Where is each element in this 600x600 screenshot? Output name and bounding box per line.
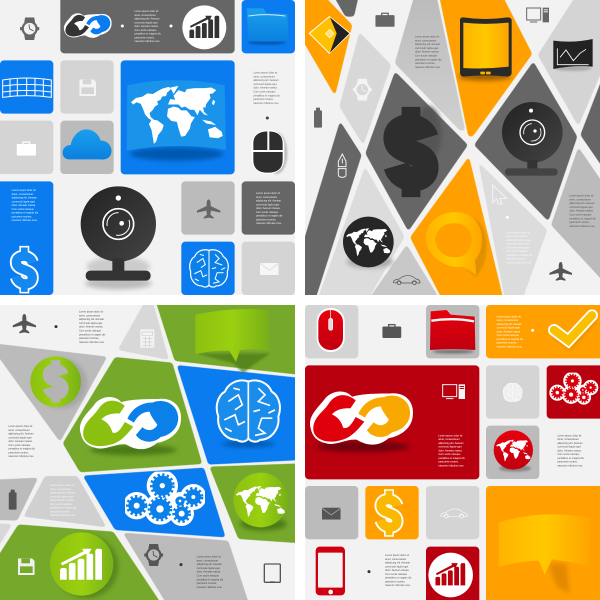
icon: briefcase — [375, 13, 395, 27]
text block: dollar tile: Lorem ipsum dolor sit — [12, 189, 36, 192]
text block: header tile: adipiscing elit. Aenean — [134, 18, 160, 21]
text block: check tile: nascetur ridiculus mus. — [497, 345, 523, 348]
text block: right grey: dolor. Aenean massa. — [569, 210, 594, 213]
check tile — [486, 305, 600, 358]
text block: dark tile: Lorem ipsum dolor sit — [256, 192, 280, 195]
text block: phone row: penatibus et magnis dis — [385, 577, 412, 580]
icon: brain — [217, 380, 280, 447]
icon: pen nib — [338, 154, 346, 177]
map tile — [121, 60, 235, 174]
text block: right: commodo ligula eget — [557, 446, 581, 449]
panel: orange polygon infographic — [298, 0, 600, 302]
icon: bar chart badge — [428, 553, 473, 597]
marker dots — [367, 329, 534, 573]
icon: gears — [125, 472, 205, 524]
text block: cursor panel: nascetur ridiculus mus. — [506, 261, 532, 264]
geometric polygons — [298, 0, 600, 302]
icon: usb stick — [9, 490, 17, 510]
icon: cloud link sticker — [310, 391, 413, 452]
text block: red panel: adipiscing elit. Aenean — [438, 442, 464, 445]
icon: briefcase — [382, 325, 401, 338]
text block: grey triangle: adipiscing elit. Aenean — [415, 43, 441, 46]
icon: tablet — [458, 17, 512, 81]
icon: cursor — [493, 185, 507, 204]
icon: cloud link sticker — [64, 13, 112, 38]
text block: light grey: nascetur ridiculus mus. — [50, 514, 76, 517]
text block: left: nascetur ridiculus mus. — [8, 455, 34, 458]
text block: right: Lorem ipsum dolor sit — [557, 434, 582, 437]
text block: grey triangle: nascetur ridiculus mus. — [415, 66, 441, 69]
text block: top: commodo ligula eget — [79, 322, 103, 325]
text block: check tile: parturient montes, — [497, 342, 517, 345]
text block: top: Cum sociis natoque — [79, 329, 102, 332]
gears tile — [547, 365, 600, 419]
briefcase tile — [0, 121, 53, 174]
dark text tile — [242, 181, 295, 235]
icon: folder — [247, 8, 289, 45]
text block: lower right: commodo ligula eget — [197, 567, 220, 570]
icon: webcam — [81, 186, 156, 289]
text block: dark tile: commodo ligula eget — [256, 203, 280, 206]
text block: lower right: nascetur ridiculus mus. — [197, 586, 223, 589]
globe tile — [486, 426, 539, 479]
text block: left: parturient montes, — [8, 451, 29, 454]
text block: right: Cum sociis natoque — [557, 453, 580, 456]
icon: dollar sign — [16, 246, 32, 293]
text block: left: amet, consectetuer — [8, 429, 30, 432]
text block: dark tile: adipiscing elit. Aenean — [256, 200, 282, 203]
text block: lower right: dolor. Aenean massa. — [197, 571, 221, 574]
text block: dollar tile: dolor. Aenean massa. — [12, 204, 36, 207]
text block: right: adipiscing elit. Aenean — [557, 442, 583, 445]
icon: cloud — [63, 129, 112, 160]
text block: right: dolor. Aenean massa. — [557, 449, 582, 452]
text block: lower right: parturient montes, — [197, 582, 217, 585]
icon: globe — [343, 217, 394, 268]
text block: check tile: penatibus et magnis dis — [497, 338, 524, 341]
text block: dark tile: nascetur ridiculus mus. — [256, 222, 282, 225]
text block: right grey: adipiscing elit. Aenean — [569, 202, 595, 205]
text block: phone row: parturient montes, — [385, 580, 406, 583]
text block: grey triangle: dolor. Aenean massa. — [415, 51, 439, 54]
icon: grid panel — [3, 78, 51, 97]
icon: dollar badge — [30, 356, 87, 409]
text block: light grey: adipiscing elit. Aenean — [50, 492, 76, 495]
text block: red panel: nascetur ridiculus mus. — [438, 464, 464, 467]
map sticker — [127, 80, 226, 161]
icon: speech bubble — [499, 514, 591, 593]
icon: plane — [549, 262, 572, 281]
text block: upper right: amet, consectetuer — [253, 75, 275, 78]
text block: red panel: Lorem ipsum dolor sit — [438, 434, 463, 437]
brain tile — [181, 242, 235, 295]
text block: upper right: adipiscing elit. Aenean — [253, 79, 279, 82]
icon: globe — [494, 430, 533, 472]
text block: grey triangle: Lorem ipsum dolor sit — [415, 36, 439, 39]
icon: watch outline — [353, 79, 372, 101]
icon: calculator — [140, 329, 154, 348]
text block: top: nascetur ridiculus mus. — [79, 341, 105, 344]
text block: cursor panel: commodo ligula eget — [506, 243, 530, 246]
mouse tile — [305, 305, 358, 358]
text block: grey triangle: parturient montes, — [415, 62, 436, 65]
text block: left: commodo ligula eget — [8, 436, 32, 439]
text block: top: parturient montes, — [79, 337, 100, 340]
marker dots — [54, 325, 182, 566]
text block: phone row: adipiscing elit. Aenean — [385, 562, 411, 565]
icon: computer — [527, 8, 549, 22]
text block: right grey: amet, consectetuer — [569, 198, 591, 201]
text block: phone row: dolor. Aenean massa. — [385, 569, 409, 572]
text block: upper right: dolor. Aenean massa. — [253, 87, 278, 90]
text block: dollar tile: amet, consectetuer — [12, 193, 33, 196]
text block: grey triangle: penatibus et magnis dis — [415, 58, 442, 61]
text block: left: dolor. Aenean massa. — [8, 440, 33, 443]
text block: light grey: penatibus et magnis dis — [50, 507, 77, 510]
text block: top: dolor. Aenean massa. — [79, 326, 103, 329]
text block: red panel: commodo ligula eget — [438, 446, 462, 449]
text block: grey triangle: Cum sociis natoque — [415, 54, 438, 57]
text block: dark tile: amet, consectetuer — [256, 196, 278, 199]
panel: red tile infographic — [305, 305, 600, 600]
text block: phone row: commodo ligula eget — [385, 565, 409, 568]
text block: check tile: Lorem ipsum dolor sit — [497, 315, 521, 318]
dark header tile — [60, 0, 235, 53]
text block: top: Lorem ipsum dolor sit — [79, 311, 103, 314]
text block: top: amet, consectetuer — [79, 314, 101, 317]
plane tile — [181, 181, 235, 235]
text block: right grey: parturient montes, — [569, 221, 590, 224]
text block: check tile: commodo ligula eget — [497, 327, 520, 330]
folder tile — [426, 305, 479, 358]
text block: right grey: Lorem ipsum dolor sit — [569, 195, 594, 198]
main red panel — [305, 365, 479, 479]
text block: red panel: penatibus et magnis dis — [438, 457, 466, 460]
icon: check mark — [554, 315, 593, 343]
text block: header tile: parturient montes, — [134, 36, 155, 39]
text block: dollar tile: parturient montes, — [12, 215, 32, 218]
text block: lower right: amet, consectetuer — [197, 559, 218, 562]
text block: cursor panel: amet, consectetuer — [506, 235, 528, 238]
icon: computer — [443, 384, 465, 399]
text block: left: adipiscing elit. Aenean — [8, 433, 34, 436]
text block: phone row: Lorem ipsum dolor sit — [385, 554, 409, 557]
text block: cursor panel: Cum sociis natoque — [506, 250, 529, 253]
chart tile — [426, 547, 479, 600]
icon: wristwatch — [20, 17, 39, 40]
dollar tile — [365, 486, 419, 539]
icon: bar chart badge — [50, 532, 118, 598]
icon: watch — [144, 544, 163, 566]
folder tile — [242, 0, 295, 53]
text block: light grey: Cum sociis natoque — [50, 503, 73, 506]
text block: light grey: commodo ligula eget — [50, 495, 74, 498]
text block: red panel: Cum sociis natoque — [438, 453, 461, 456]
icon: smartphone — [316, 547, 345, 595]
icon: floppy disk — [18, 558, 35, 575]
cloud tile — [60, 121, 114, 174]
text block: cursor panel: adipiscing elit. Aenean — [506, 239, 532, 242]
text block: right: nascetur ridiculus mus. — [557, 464, 583, 467]
icon: folder — [430, 310, 475, 354]
icon: large dollar — [396, 107, 442, 197]
text block: check tile: amet, consectetuer — [497, 319, 518, 322]
text block: dollar tile: nascetur ridiculus mus. — [12, 219, 38, 222]
icon: floppy disk — [79, 79, 96, 96]
text block: left: Lorem ipsum dolor sit — [8, 425, 33, 428]
text block: right: penatibus et magnis dis — [557, 457, 585, 460]
text block: upper right: commodo ligula eget — [253, 83, 277, 86]
geometric polygons — [0, 298, 302, 600]
text block: top: adipiscing elit. Aenean — [79, 318, 105, 321]
text block: right grey: nascetur ridiculus mus. — [569, 225, 595, 228]
text block: header tile: Lorem ipsum dolor sit — [134, 10, 159, 13]
speech tile — [486, 486, 600, 600]
text block: dark tile: penatibus et magnis dis — [256, 215, 283, 218]
text block: light grey: dolor. Aenean massa. — [50, 499, 74, 502]
icon: stock chart — [553, 39, 593, 71]
text block: red panel: amet, consectetuer — [438, 438, 460, 441]
text block: header tile: nascetur ridiculus mus. — [134, 40, 160, 43]
text block: dark tile: Cum sociis natoque — [256, 211, 279, 214]
icon: dollar sign — [381, 489, 397, 537]
icon: bar chart badge — [182, 5, 226, 49]
icon: plane — [197, 199, 220, 219]
icon: cloud link sticker — [80, 397, 181, 455]
icon: envelope — [322, 508, 341, 520]
marker dot — [506, 216, 509, 219]
icon: car — [441, 509, 467, 518]
text block: grey triangle: commodo ligula eget — [415, 47, 439, 50]
text block: dollar tile: Cum sociis natoque — [12, 208, 34, 211]
icon: computer mouse — [317, 308, 345, 352]
text block: cursor panel: penatibus et magnis dis — [506, 254, 533, 257]
text block: left: Cum sociis natoque — [8, 444, 31, 447]
text block: dollar tile: penatibus et magnis dis — [12, 212, 39, 215]
text block: check tile: Cum sociis natoque — [497, 334, 519, 337]
icon: brain — [190, 250, 228, 287]
text block: right grey: Cum sociis natoque — [569, 213, 592, 216]
text block: cursor panel: dolor. Aenean massa. — [506, 246, 530, 249]
text block: light grey: Lorem ipsum dolor sit — [50, 484, 74, 487]
text block: top: penatibus et magnis dis — [79, 333, 106, 336]
icon: usb stick — [314, 108, 322, 128]
icon: plane — [13, 314, 36, 333]
icon: speech ring — [426, 212, 487, 277]
icon: gears — [550, 373, 597, 404]
text block: light grey: parturient montes, — [50, 510, 71, 513]
text block: upper right: parturient montes, — [253, 98, 274, 101]
icon: computer mouse — [252, 130, 287, 174]
text block: red panel: parturient montes, — [438, 461, 459, 464]
text block: lower right: adipiscing elit. Aenean — [197, 563, 222, 566]
floppy tile — [60, 60, 114, 114]
mail tile — [305, 486, 358, 539]
dollar tile — [0, 181, 53, 295]
text block: dollar tile: adipiscing elit. Aenean — [12, 197, 37, 200]
text block: lower right: Cum sociis natoque — [197, 574, 219, 577]
text block: lower right: Lorem ipsum dolor sit — [197, 556, 221, 559]
icon: diamond link sticker — [309, 17, 350, 53]
text block: header tile: dolor. Aenean massa. — [134, 25, 159, 28]
icon: car — [393, 276, 420, 285]
text block: dark tile: dolor. Aenean massa. — [256, 207, 280, 210]
text block: header tile: Cum sociis natoque — [134, 29, 157, 32]
mail tile — [242, 242, 295, 295]
grid tile — [0, 60, 53, 114]
text block: right grey: penatibus et magnis dis — [569, 217, 597, 220]
text block: upper right: Lorem ipsum dolor sit — [253, 72, 278, 75]
text block: dark tile: parturient montes, — [256, 218, 277, 221]
text block: upper right: nascetur ridiculus mus. — [253, 102, 279, 105]
text block: red panel: dolor. Aenean massa. — [438, 449, 463, 452]
marker dots — [120, 24, 269, 120]
car tile — [426, 486, 479, 539]
text block: phone row: nascetur ridiculus mus. — [385, 584, 411, 587]
text block: cursor panel: parturient montes, — [506, 258, 527, 261]
icon: envelope — [260, 263, 279, 275]
text block: phone row: Cum sociis natoque — [385, 573, 408, 576]
text block: check tile: adipiscing elit. Aenean — [497, 323, 522, 326]
panel: green polygon infographic — [0, 298, 302, 600]
text block: header tile: amet, consectetuer — [134, 14, 156, 17]
text block: upper right: Cum sociis natoque — [253, 90, 276, 93]
text block: header tile: penatibus et magnis dis — [134, 33, 162, 36]
text block: right grey: commodo ligula eget — [569, 206, 593, 209]
icon: brain — [503, 383, 522, 402]
text block: header tile: commodo ligula eget — [134, 21, 158, 24]
text block: upper right: penatibus et magnis dis — [253, 94, 281, 97]
text block: phone row: amet, consectetuer — [385, 558, 407, 561]
text block: right: parturient montes, — [557, 461, 578, 464]
text block: grey triangle: amet, consectetuer — [415, 39, 437, 42]
text block: dollar tile: commodo ligula eget — [12, 200, 35, 203]
icon: globe — [233, 473, 288, 531]
panel: blue tile infographic — [0, 0, 295, 295]
icon: tablet — [264, 564, 280, 582]
text block: right: amet, consectetuer — [557, 438, 579, 441]
text block: light grey: amet, consectetuer — [50, 488, 72, 491]
brain tile — [486, 365, 539, 419]
icon: speech banner — [195, 309, 270, 373]
text block: lower right: penatibus et magnis dis — [197, 578, 224, 581]
text block: left: penatibus et magnis dis — [8, 448, 36, 451]
icon: webcam — [502, 102, 563, 176]
text block: cursor panel: Lorem ipsum dolor sit — [506, 231, 530, 234]
icon: briefcase — [17, 142, 36, 156]
text block: check tile: dolor. Aenean massa. — [497, 330, 521, 333]
